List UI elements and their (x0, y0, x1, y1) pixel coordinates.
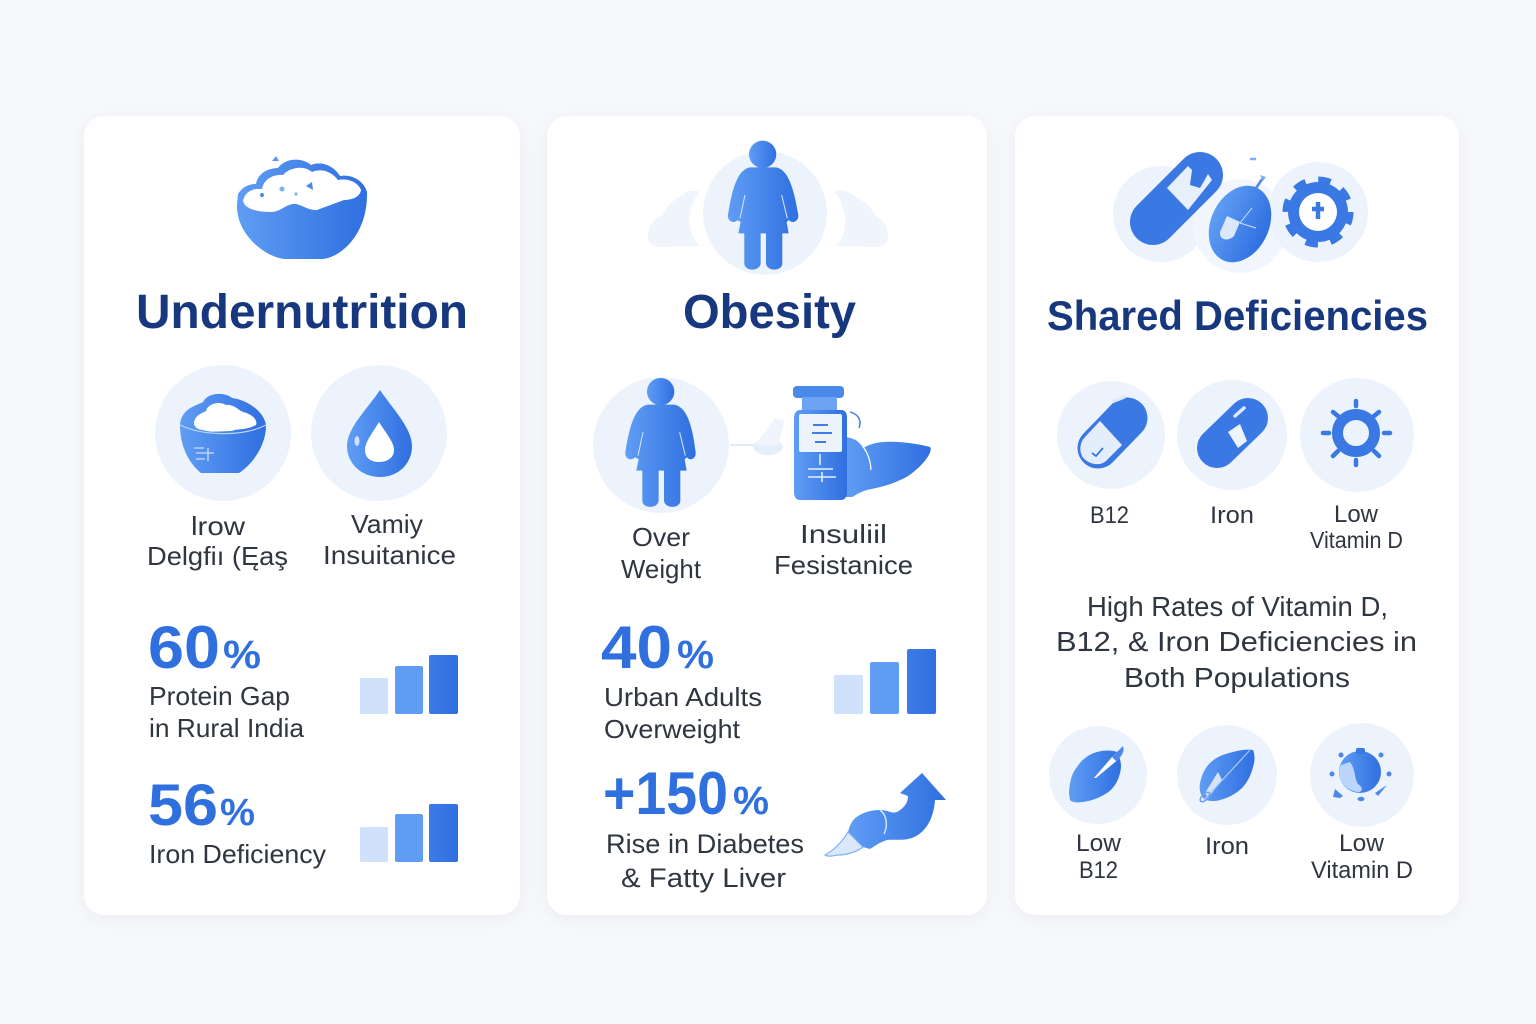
text: rise in diabetes (606, 829, 804, 893)
icon: rising arrow (825, 773, 946, 856)
bar chart: iron deficiency (360, 804, 458, 862)
label: low B12: B12 (1079, 857, 1118, 884)
stat: 60%: 60 (148, 614, 220, 681)
label: iron deficiency garbled (147, 511, 288, 571)
stat: +150%: % (733, 779, 769, 823)
label: low vitamin D: Low (1334, 501, 1379, 528)
text block: high rates: B12, & Iron Deficiencies in (1056, 626, 1417, 657)
icon: connector to bottle (730, 418, 785, 455)
icon: droplet in circle (311, 365, 447, 501)
heading: Shared Deficiencies: Shared Deficiencies (1047, 292, 1428, 339)
text: protein gap: Protein Gap (149, 681, 290, 711)
label: iron deficiency garbled: Delgfiı (Ęaş (147, 541, 288, 571)
heading: Undernutrition: Undernutrition (136, 286, 468, 339)
label: low vitamin D (1310, 501, 1403, 553)
stat: 56% (148, 773, 255, 838)
icon: sun (1300, 378, 1414, 492)
icon: small bowl in circle (155, 365, 291, 501)
icon: rice bowl (237, 156, 367, 259)
icon: iron capsule (1177, 380, 1287, 490)
panel: obesity (547, 116, 987, 915)
text: rise in diabetes: & Fatty Liver (621, 863, 786, 893)
icon: B12 capsule (1057, 381, 1165, 489)
icon: leaf iron (1177, 725, 1277, 825)
bar chart: protein gap (360, 655, 458, 714)
panel: shared deficiencies (1015, 116, 1459, 915)
text: urban adults (604, 682, 762, 744)
label: vitamin insufficiency garbled: Vamiy (351, 509, 423, 539)
label: Iron second: Iron (1205, 833, 1249, 860)
label: insulin resistance garbled (774, 519, 913, 580)
label: insulin resistance garbled: Fesistanice (774, 550, 913, 580)
stat: 40%: 40 (601, 614, 672, 681)
label: insulin resistance garbled: Insuliil (800, 519, 887, 549)
stat: 56%: 56 (148, 773, 218, 838)
icon: insulin bottle and liver (793, 386, 931, 500)
icon: overweight person in circle (593, 377, 729, 513)
label: over weight: Weight (621, 554, 702, 584)
label: over weight: Over (632, 522, 690, 552)
icon: leaf low B12 (1049, 726, 1147, 824)
label: low vitamin D: Vitamin D (1310, 527, 1403, 553)
stat: 56%: % (220, 792, 255, 834)
stat: +150%: +150 (603, 760, 728, 827)
text block: high rates: Both Populations (1124, 662, 1350, 693)
panel: undernutrition (84, 116, 520, 915)
label: vitamin insufficiency garbled: Insuitanice (323, 540, 456, 570)
label: iron deficiency garbled: lrow (191, 511, 245, 541)
stat: 40%: % (677, 633, 714, 677)
label: Iron: Iron (1210, 502, 1254, 529)
text: urban adults: Overweight (604, 714, 741, 744)
bar chart: urban adults (834, 649, 936, 714)
label: low vitamin D second: Vitamin D (1311, 857, 1413, 884)
label: B12: B12 (1090, 502, 1129, 529)
label: over weight (621, 522, 702, 584)
stat: 40% (601, 614, 714, 681)
stat: 60% (148, 614, 261, 681)
label: vitamin insufficiency garbled (323, 509, 456, 570)
label: low vitamin D second: Low (1339, 830, 1385, 857)
icon: capsule, seed and gear (1113, 159, 1368, 273)
text: urban adults: Urban Adults (604, 682, 762, 712)
label: low B12: Low (1076, 830, 1122, 857)
text: iron deficiency: Iron Deficiency (149, 839, 326, 869)
label: low B12 (1076, 830, 1122, 884)
text block: high rates (1056, 591, 1417, 693)
text: rise in diabetes: Rise in Diabetes (606, 829, 804, 859)
text: protein gap (149, 681, 305, 743)
icon: clouds and person (648, 141, 888, 275)
heading: Obesity: Obesity (683, 286, 856, 339)
label: low vitamin D second (1311, 830, 1413, 884)
text block: high rates: High Rates of Vitamin D, (1087, 591, 1388, 622)
text: protein gap: in Rural India (149, 713, 305, 743)
icon: vitamin D globe (1310, 723, 1414, 827)
stat: 60%: % (223, 633, 261, 677)
